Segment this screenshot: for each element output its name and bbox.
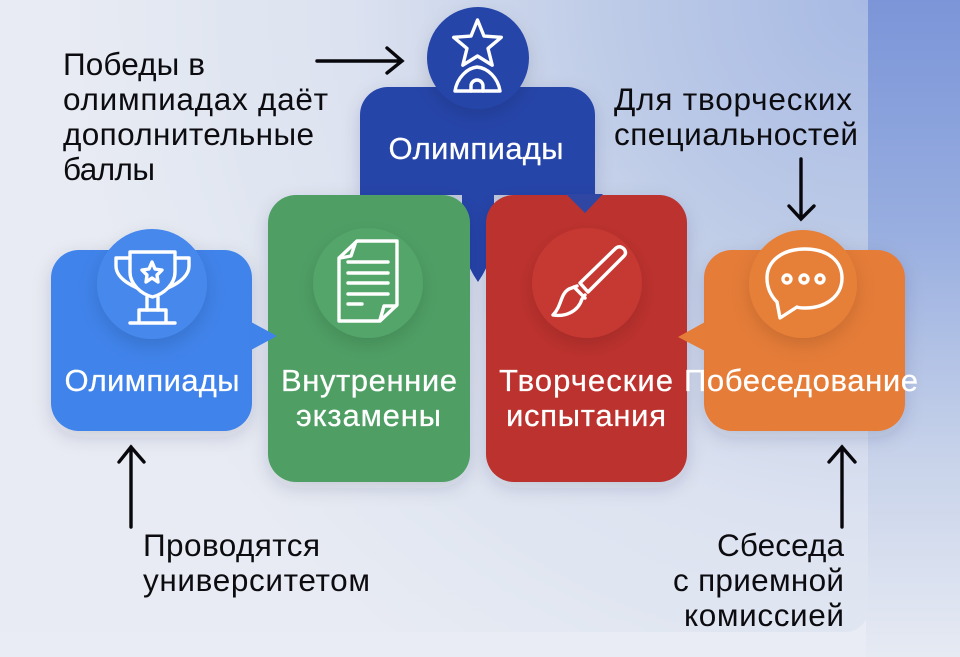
arrow: to interview from top (789, 159, 814, 219)
blue tail notch (566, 194, 603, 213)
label: creative tests: Творческие (499, 363, 673, 398)
icon: speech bubble (749, 230, 857, 338)
panel: olympiads dark blue (360, 7, 595, 282)
text: creative note: Для творческих (614, 81, 852, 117)
text: interview note: комиссией (684, 597, 844, 633)
label: internal exams: Внутренние (281, 363, 457, 398)
tail: light blue to green (251, 322, 277, 350)
icon: document (313, 228, 423, 338)
panel: green internal exams: экзамены (296, 398, 441, 433)
text: university note: Проводятся (143, 527, 320, 563)
panel: orange interview (704, 230, 905, 431)
text: interview note: Сбеседа (717, 527, 844, 563)
text: university note (143, 527, 370, 598)
arrow: to olympiads (317, 48, 402, 73)
arrow: up to olympiads (119, 447, 144, 527)
arrow: up to interview (829, 447, 855, 527)
text: olympic wins note: дополнительные (63, 116, 314, 152)
text: university note: университетом (143, 562, 370, 598)
text: olympic wins note (63, 46, 328, 187)
icon: trophy (97, 229, 207, 339)
label: olympiads: Олимпиады (64, 363, 240, 398)
label: interview: Побеседование (684, 363, 918, 398)
text: creative note: специальностей (614, 116, 858, 152)
panel: olympiads light blue (51, 229, 252, 431)
text: olympic wins note: олимпиадах даёт (63, 81, 328, 117)
panel: red creative tests: испытания (506, 398, 666, 433)
text: olympic wins note: баллы (63, 151, 155, 187)
panel: red creative tests (486, 194, 687, 482)
panel: green internal exams (268, 195, 470, 482)
tail: orange to red (678, 322, 705, 351)
icon: paintbrush (532, 228, 642, 338)
text: olympic wins note: Победы в (63, 46, 205, 82)
icon: star and dome (427, 7, 529, 109)
text: interview note: с приемной (673, 562, 844, 598)
heading: olympiads top: Олимпиады (388, 131, 564, 166)
text: interview note (673, 527, 844, 633)
text: creative note (614, 81, 858, 152)
